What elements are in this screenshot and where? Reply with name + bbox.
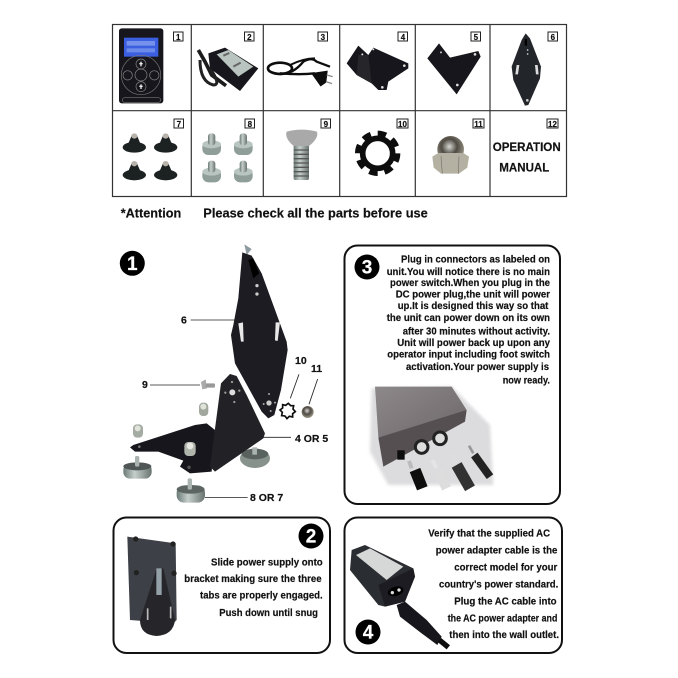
number 1: 1 — [176, 33, 181, 42]
number 1 — [174, 32, 183, 42]
callout labels: 10 — [295, 355, 307, 367]
instructions text — [428, 529, 559, 641]
instructions text: the unit can power down on its own — [387, 313, 550, 324]
number 3 — [318, 32, 328, 42]
instructions text: Verify that the supplied AC — [428, 529, 550, 540]
instructions text: now ready. — [503, 375, 550, 386]
badge 2: 2 — [306, 526, 316, 548]
number 8 — [245, 119, 254, 129]
badge 1 — [120, 251, 145, 276]
mounting plate — [231, 244, 288, 418]
number 2: 2 — [247, 33, 252, 42]
part 11: dome nut — [432, 136, 469, 174]
part 5: bracket — [427, 43, 481, 94]
washer and nut — [280, 403, 314, 419]
callout labels: 8 OR 7 — [250, 492, 283, 504]
badge 4: 4 — [363, 622, 374, 644]
instructions text: bracket making sure the three — [184, 574, 322, 585]
instructions text: country's power standard. — [439, 580, 559, 591]
callout labels: 4 OR 5 — [295, 433, 328, 445]
instructions text: unit.You will notice there is no main — [387, 267, 550, 278]
instructions text: Slide power supply onto — [211, 557, 323, 568]
leader lines — [150, 320, 318, 498]
parts table — [112, 24, 566, 197]
step 1: assembly diagram — [120, 244, 328, 504]
number 3: 3 — [321, 33, 326, 42]
number 6: 6 — [551, 33, 556, 42]
instructions text: tabs are properly engaged. — [200, 591, 323, 602]
base bracket, feet and nuts — [123, 374, 270, 503]
number 11: 11 — [474, 120, 483, 129]
number 9 — [321, 119, 330, 129]
attention note: Please check all the parts before use — [203, 206, 428, 220]
photo: connectors on unit — [370, 387, 493, 488]
instructions text: Plug the AC cable into — [454, 596, 557, 607]
number 11 — [473, 119, 484, 129]
number 5: 5 — [474, 33, 479, 42]
callout labels: 9 — [142, 379, 148, 391]
step 3 panel — [344, 246, 560, 504]
instructions text — [184, 557, 323, 619]
number 7 — [174, 119, 184, 129]
number 12: 12 — [548, 120, 557, 129]
number 6 — [548, 32, 558, 42]
number 4: 4 — [401, 33, 406, 42]
instructions text: up.It is designed this way so that — [398, 301, 549, 312]
callout labels: 11 — [311, 363, 322, 375]
attention note: *Attention — [121, 206, 181, 220]
instructions text: Unit will power back up upon any — [397, 338, 550, 349]
callout labels: 6 — [181, 314, 187, 326]
number 4 — [398, 32, 408, 42]
instructions text: after 30 minutes without activity. — [403, 326, 550, 337]
part 1: power supply unit — [119, 28, 163, 103]
part 6: mounting plate — [512, 33, 541, 106]
instructions text: then into the wall outlet. — [449, 630, 559, 641]
instructions text: DC power plug,the unit will power — [396, 290, 550, 301]
instructions text: operator input including foot switch — [387, 350, 550, 361]
part 9: screw — [286, 130, 317, 180]
instructions text: Push down until snug — [219, 608, 318, 619]
instructions text: power adapter cable is the — [436, 545, 558, 556]
part 8: magnetic feet — [202, 133, 253, 182]
part 3: power cord — [268, 58, 333, 86]
part 4: bracket — [347, 46, 408, 90]
number 5 — [471, 32, 480, 42]
step 2 panel — [114, 518, 330, 653]
part 2: power adapter — [198, 48, 258, 91]
part 12: operation manual: OPERATION — [493, 140, 561, 154]
photo: power supply on bracket — [127, 536, 177, 636]
callout labels — [142, 314, 328, 504]
number 8: 8 — [248, 120, 253, 129]
number 7: 7 — [177, 120, 182, 129]
step 4 panel — [344, 518, 562, 653]
badge 4 — [356, 620, 380, 644]
number 9: 9 — [324, 120, 329, 129]
number 2 — [244, 32, 254, 42]
number 10: 10 — [398, 120, 407, 129]
instructions text: the AC power adapter and — [448, 613, 557, 624]
part 7: rubber feet — [123, 133, 177, 180]
badge 2 — [298, 524, 324, 548]
part 10: star washer — [358, 134, 397, 173]
photo: AC adapter and plug — [350, 545, 448, 647]
part 12: operation manual — [493, 140, 561, 175]
badge 3: 3 — [362, 258, 372, 278]
instructions text — [387, 254, 550, 386]
instructions text: correct model for your — [454, 563, 557, 574]
part 12: operation manual: MANUAL — [499, 161, 549, 175]
instructions text: Plug in connectors as labeled on — [401, 254, 550, 265]
instructions text: power switch.When you plug in the — [390, 278, 550, 289]
badge 3 — [354, 254, 380, 280]
badge 1: 1 — [127, 254, 138, 275]
instructions text: activation.Your power supply is — [406, 362, 549, 373]
